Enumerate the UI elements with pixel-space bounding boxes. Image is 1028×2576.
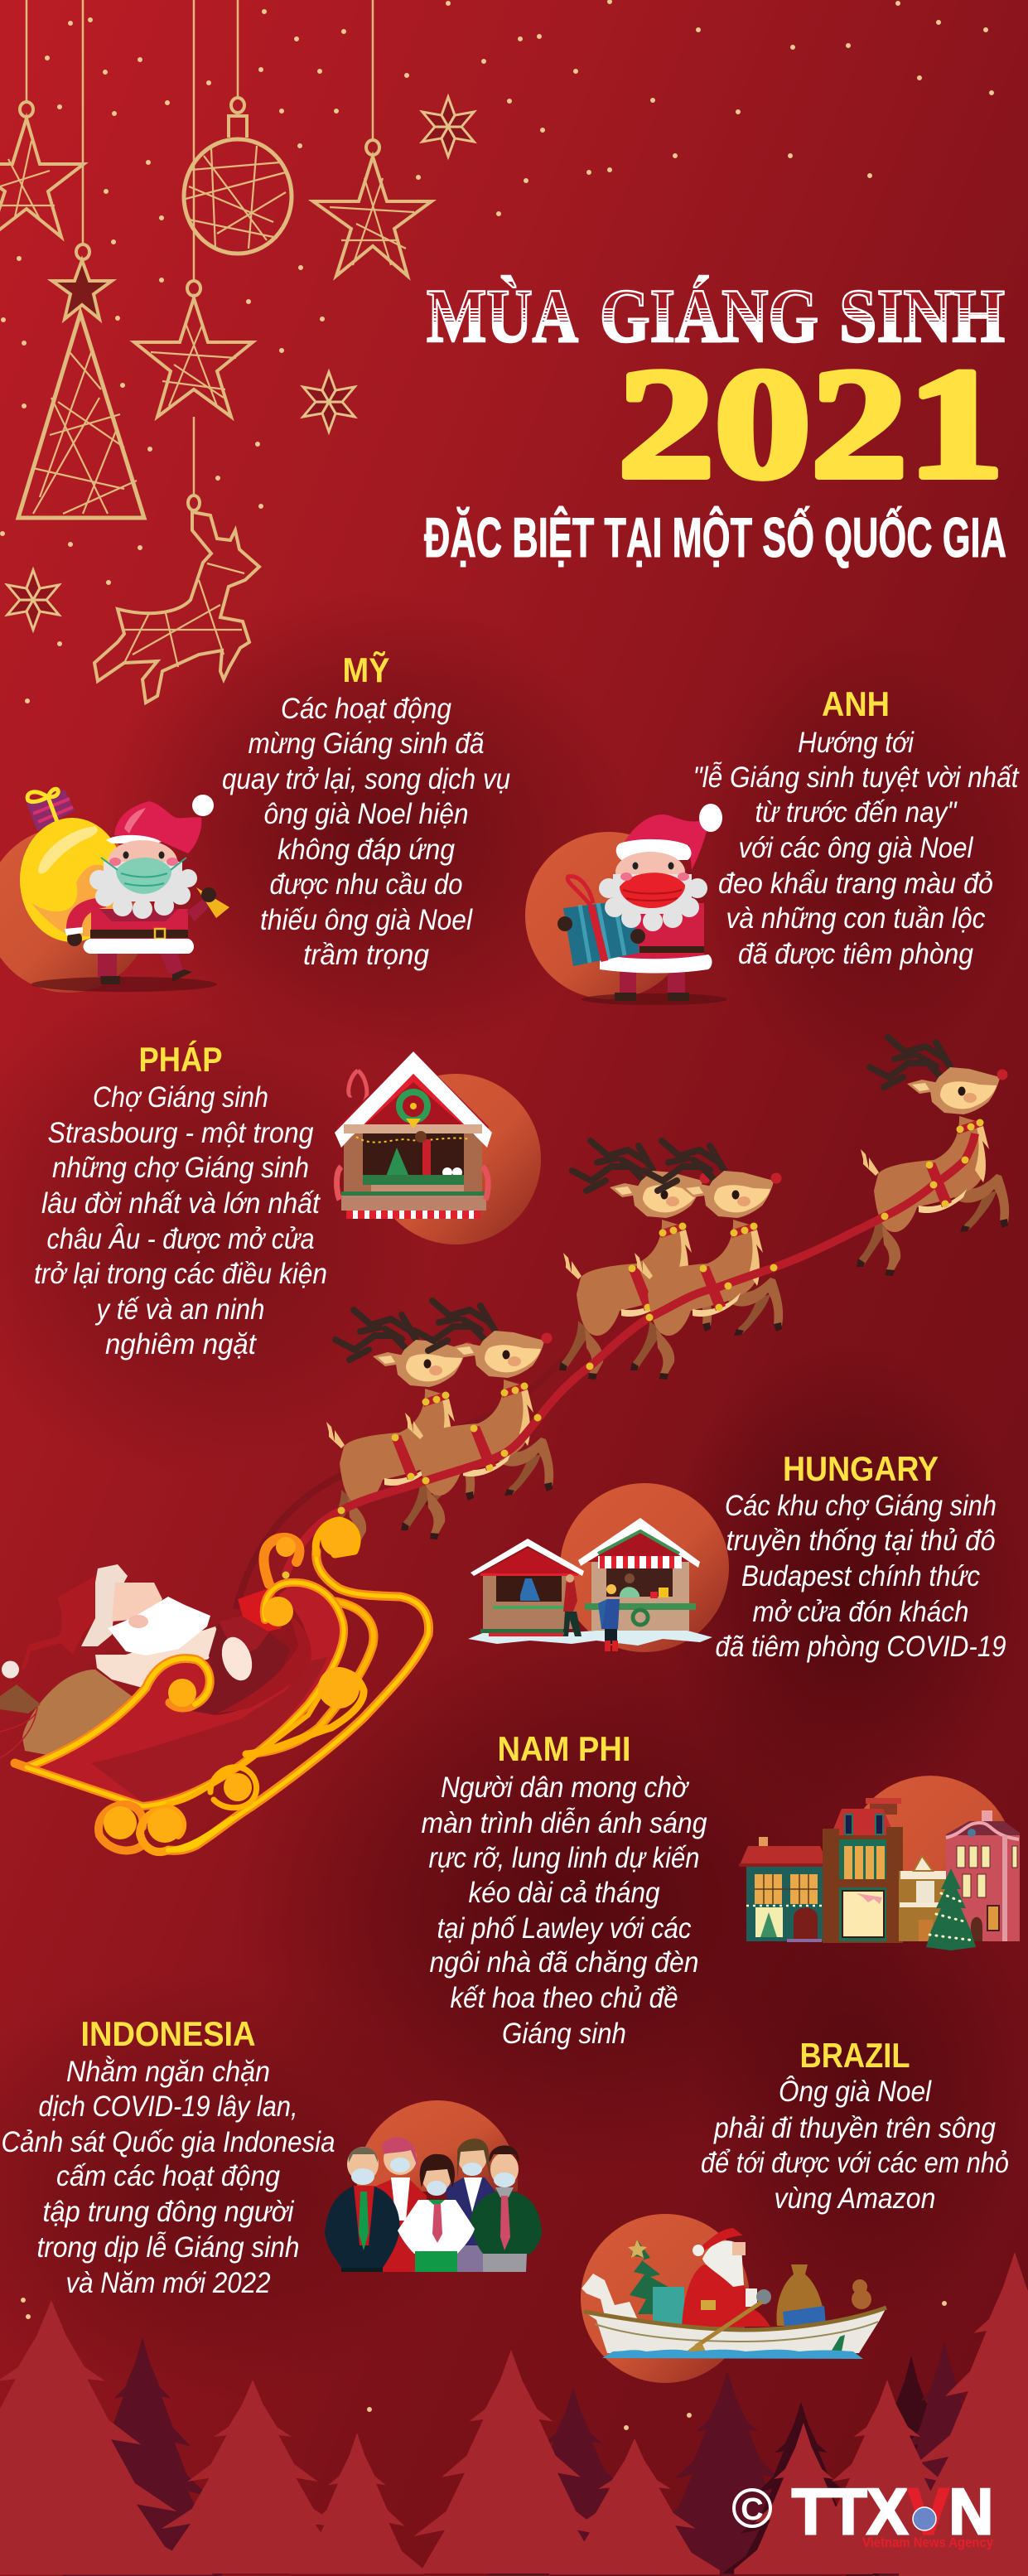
- main harness: [285, 1133, 975, 1576]
- santa: [682, 2264, 770, 2327]
- body: Mỹ: mừng Giáng sinh đã: [249, 727, 484, 760]
- person left in navy suit: [325, 2147, 400, 2272]
- body: Pháp: trở lại trong các điều kiện: [34, 1258, 327, 1290]
- heading: Hungary: HUNGARY: [783, 1449, 939, 1488]
- panel: Indonesia text: [2, 2014, 335, 2299]
- hull: [584, 2308, 886, 2353]
- illustration: Santa in sleigh: [0, 1520, 429, 1852]
- body: Mỹ: quay trở lại, song dịch vụ: [222, 763, 510, 795]
- harness bells: [286, 1160, 965, 1575]
- small tree: [630, 2240, 688, 2314]
- body: Anh: từ trước đến nay": [755, 796, 958, 829]
- panel: Brazil text: [701, 2036, 1009, 2215]
- foreground trees: [0, 2252, 1028, 2576]
- left stall: [471, 1539, 584, 1636]
- body: Indonesia: Cảnh sát Quốc gia Indonesia: [2, 2126, 335, 2158]
- illustration: Santa with red mask and gift: [525, 804, 727, 1005]
- ornament: star 4: [134, 281, 253, 417]
- title: [424, 273, 1006, 569]
- reindeer front: [857, 1037, 1009, 1276]
- harness ropes: [236, 1326, 603, 1609]
- bottle: [830, 2335, 845, 2353]
- body: Anh: và những con tuần lộc: [726, 902, 986, 935]
- back runner: [168, 1520, 429, 1850]
- body: Mỹ: trầm trọng: [303, 939, 430, 971]
- heading: Anh: ANH: [822, 684, 890, 723]
- illustration: Santa in a rowing boat: [581, 2214, 886, 2383]
- illustration: decorated houses: [739, 1776, 1020, 1950]
- body: Mỹ: được nhu cầu do: [270, 868, 462, 901]
- hat: [21, 1576, 95, 1670]
- globe: [913, 2507, 936, 2530]
- wordmark: TTXVN: [792, 2475, 993, 2548]
- body: Pháp: y tế và an ninh: [95, 1293, 264, 1326]
- title line 1: GIÁNG: [600, 273, 818, 358]
- body: Nam Phi: [421, 1771, 707, 2050]
- hanging strings: [27, 0, 373, 495]
- person right in green suit: [471, 2145, 542, 2272]
- heading: Nam Phi: NAM PHI: [497, 1729, 631, 1768]
- person back left: [373, 2137, 429, 2272]
- body: Nam Phi: màn trình diễn ánh sáng: [421, 1807, 707, 1839]
- house 1: [739, 1837, 829, 1942]
- body: Hungary: Budapest chính thức: [741, 1560, 980, 1592]
- heading: Pháp: PHÁP: [139, 1040, 222, 1079]
- horse head: [582, 2274, 638, 2320]
- illustration: Hungarian market stalls: [468, 1483, 729, 1652]
- reindeer pair middle front: [630, 1141, 783, 1380]
- body: Pháp: nghiêm ngặt: [105, 1328, 257, 1360]
- body: Nam Phi: Giáng sinh: [502, 2018, 626, 2050]
- body: Anh: [693, 727, 1020, 970]
- hand: [216, 1633, 258, 1684]
- body: Pháp: lâu đời nhất và lớn nhất: [41, 1187, 321, 1220]
- ornament: star 1: [0, 102, 84, 237]
- beard: [108, 1597, 210, 1655]
- body: Nam Phi: Người dân mong chờ: [441, 1771, 690, 1804]
- body: Hungary: [716, 1490, 1006, 1663]
- body: Mỹ: Các hoạt động: [281, 693, 451, 725]
- person back right: [446, 2139, 499, 2272]
- body: Mỹ: ông già Noel hiện: [263, 798, 469, 830]
- house 3: [899, 1856, 946, 1941]
- person front centre: [398, 2154, 475, 2272]
- agency name: Vietnam News Agency: [862, 2535, 993, 2550]
- house 2: [823, 1798, 903, 1943]
- body: Nam Phi: rực rỡ, lung linh dự kiến: [429, 1842, 699, 1874]
- ornament: star 3 small: [52, 244, 112, 319]
- title line 1: [427, 273, 1005, 358]
- ornament: tree: [18, 313, 144, 518]
- panel: Nam Phi text: [421, 1729, 707, 2050]
- body: Pháp: châu Âu - được mở cửa: [46, 1223, 315, 1255]
- sleigh scroll centres: [104, 1597, 360, 1843]
- sack: [22, 1670, 132, 1755]
- body: Mỹ: thiếu ông già Noel: [260, 904, 473, 936]
- body: Nam Phi: kéo dài cả tháng: [469, 1877, 660, 1909]
- body: Brazil: vùng Amazon: [774, 2182, 936, 2215]
- snow ground: [468, 1631, 712, 1646]
- panel: Anh text: [693, 684, 1020, 970]
- title year: 2021: [618, 337, 1004, 511]
- face: [112, 1583, 162, 1621]
- body: Indonesia: trong dịp lễ Giáng sinh: [36, 2231, 300, 2264]
- body: Nam Phi: tại phố Lawley với các: [437, 1912, 692, 1945]
- panel: Mỹ text: [222, 650, 510, 971]
- body: Indonesia: cấm các hoạt động: [56, 2160, 280, 2192]
- ornament: snowflake middle: [300, 372, 358, 432]
- body: Mỹ: không đáp ứng: [278, 834, 455, 866]
- ornament: ball: [184, 98, 292, 254]
- panel: Pháp text: [34, 1040, 327, 1360]
- body: Indonesia: tập trung đông người: [43, 2196, 295, 2228]
- body: Nam Phi: ngôi nhà đã chăng đèn: [429, 1946, 699, 1979]
- oar: [696, 2302, 762, 2346]
- illustration: five people wearing masks: [325, 2100, 542, 2272]
- heading: Brazil: BRAZIL: [800, 2036, 910, 2075]
- body: Pháp: [34, 1081, 327, 1360]
- panel: Hungary text: [716, 1449, 1006, 1663]
- body: Indonesia: dịch COVID-19 lây lan,: [38, 2090, 298, 2123]
- body: Anh: đeo khẩu trang màu đỏ: [718, 868, 993, 900]
- body: [95, 1626, 224, 1688]
- copyright mark: C: [741, 2492, 764, 2527]
- body: Anh: Hướng tới: [798, 727, 915, 759]
- house 4: [946, 1810, 1020, 1941]
- sack and toys: [776, 2264, 826, 2326]
- body: Hungary: truyền thống tại thủ đô: [726, 1525, 996, 1557]
- heading: Mỹ: MỸ: [343, 650, 389, 689]
- body: Nam Phi: kết hoa theo chủ đề: [451, 1982, 678, 2014]
- reindeer pair rear back: [322, 1310, 475, 1549]
- christmas tree: [926, 1868, 976, 1950]
- reindeer pair middle back: [559, 1141, 712, 1380]
- ornament: snowflake top: [419, 97, 477, 157]
- right stall: [578, 1518, 700, 1651]
- sleigh red body: [27, 1583, 344, 1806]
- illustration: Santa with green mask and sack: [0, 789, 229, 993]
- body: Hungary: Các khu chợ Giáng sinh: [725, 1490, 997, 1522]
- sleigh gold outline: [15, 1583, 364, 1852]
- ornament: star 2: [313, 140, 432, 276]
- body: Indonesia: [2, 2056, 335, 2299]
- illustration: reindeer team: [285, 1037, 1009, 1576]
- body: Brazil: phải đi thuyền trên sông: [713, 2112, 996, 2144]
- body: Mỹ: [222, 693, 510, 971]
- hair: [81, 1564, 128, 1646]
- body: Brazil: Ông già Noel: [779, 2076, 932, 2108]
- body: Anh: đã được tiêm phòng: [738, 938, 973, 970]
- body: Pháp: những chợ Giáng sinh: [52, 1152, 309, 1184]
- background trees: [56, 2337, 1016, 2576]
- title line 1: SINH: [839, 273, 1005, 358]
- heading: Indonesia: INDONESIA: [81, 2014, 255, 2053]
- title line 1: MÙA: [427, 273, 578, 358]
- body: Indonesia: Nhằm ngăn chặn: [66, 2056, 270, 2088]
- body: Pháp: Strasbourg - một trong: [48, 1117, 314, 1149]
- body: Pháp: Chợ Giáng sinh: [93, 1081, 268, 1114]
- copyright mark: [734, 2490, 770, 2527]
- body: Anh: với các ông già Noel: [739, 832, 974, 864]
- logo: TTXVN: [734, 2475, 993, 2550]
- ornament: reindeer: [94, 495, 259, 703]
- illustration: Strasbourg market stall: [335, 1051, 541, 1245]
- reindeer pair rear front: [401, 1301, 553, 1539]
- robe: [186, 1616, 290, 1715]
- body: Indonesia: và Năm mới 2022: [66, 2267, 270, 2299]
- body: Hungary: mở cửa đón khách: [752, 1596, 969, 1628]
- water: [602, 2350, 863, 2359]
- ornament: snowflake lower: [4, 570, 62, 630]
- body: Brazil: [701, 2076, 1009, 2215]
- small seat behind: [238, 1587, 282, 1636]
